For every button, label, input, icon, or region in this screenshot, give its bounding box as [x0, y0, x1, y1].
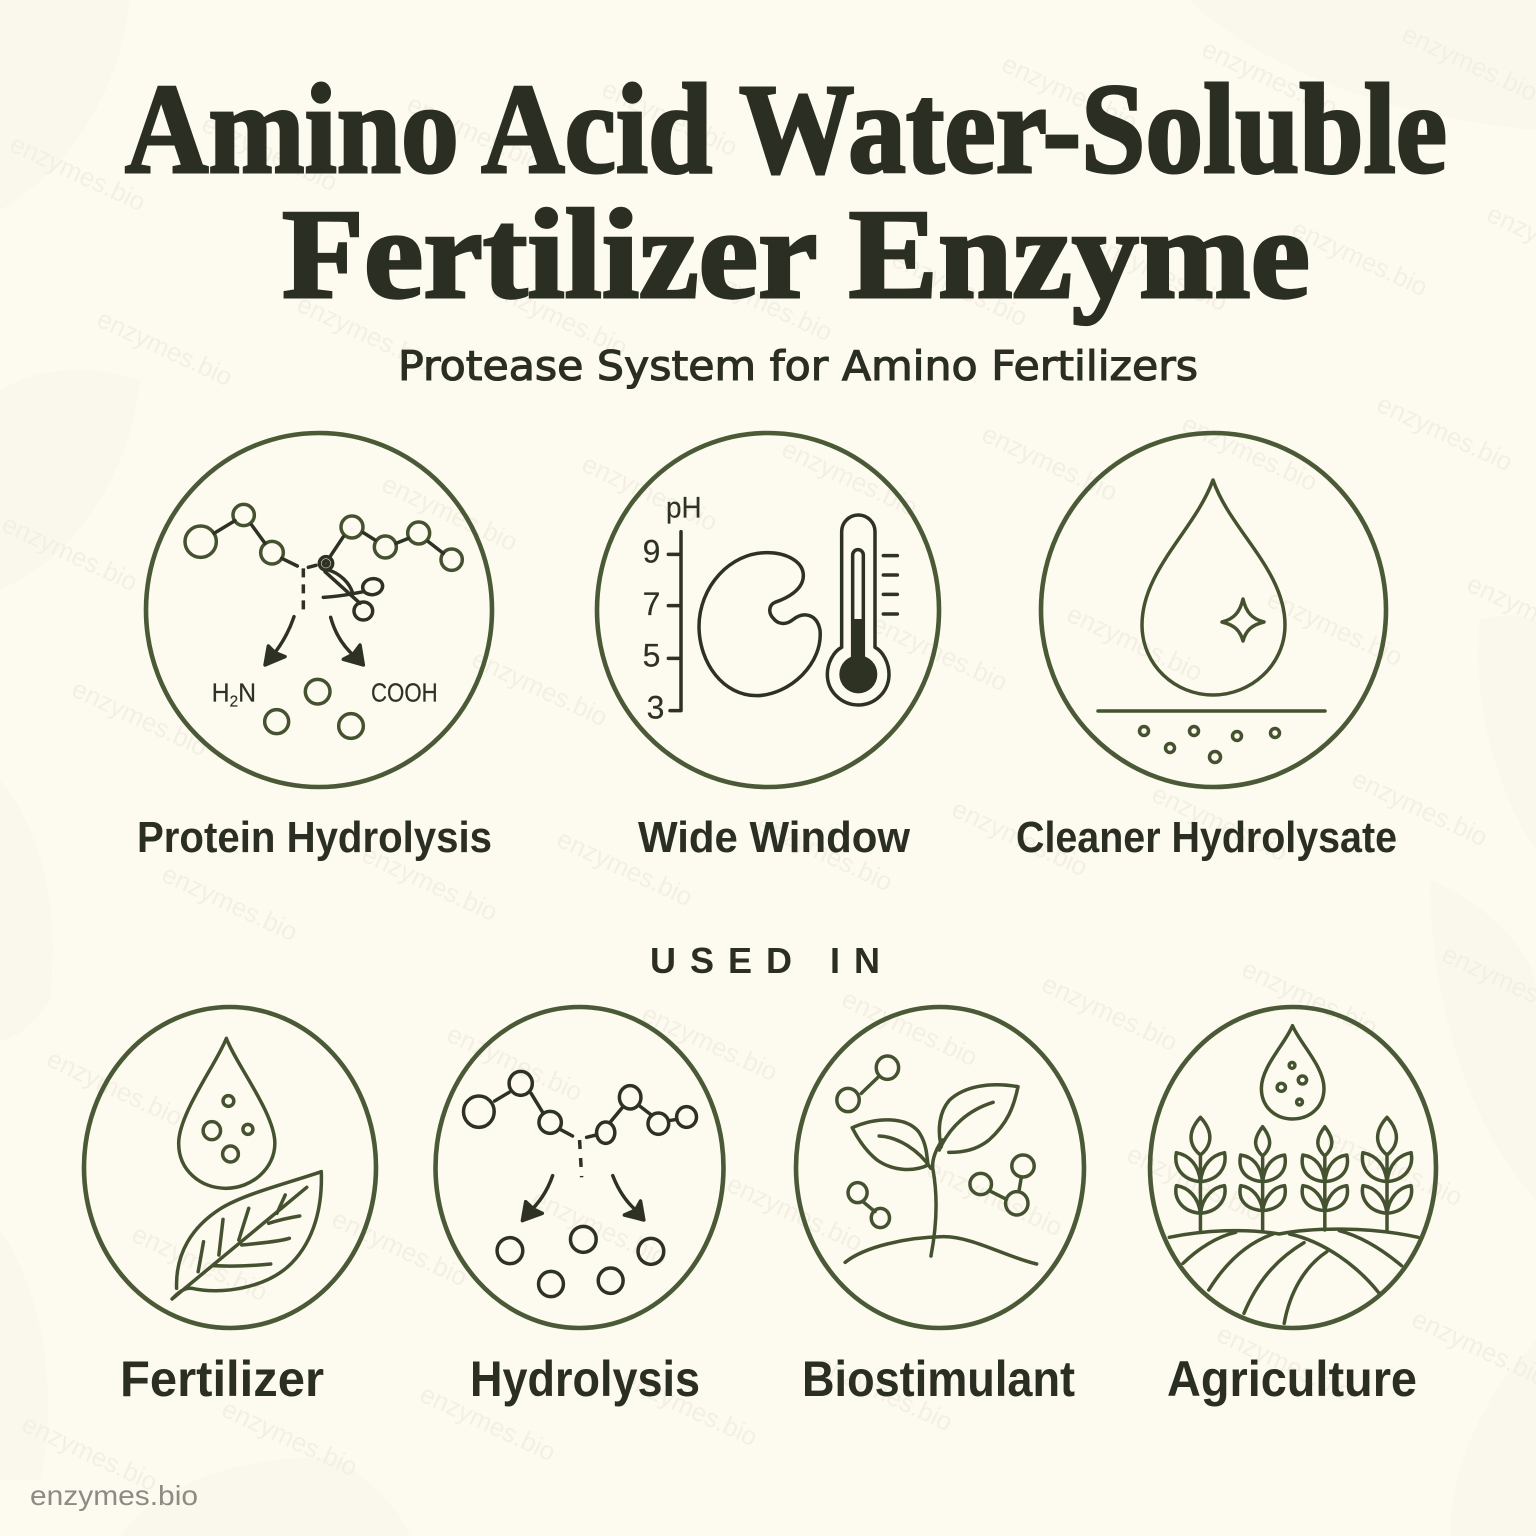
- icon: pH scale, enzyme and thermometer: 9: [643, 534, 660, 570]
- panel: wide window: [597, 433, 939, 862]
- text: enzymes.bio: [1212, 1318, 1357, 1407]
- text: enzymes.bio: [467, 643, 612, 732]
- text: enzymes.bio: [552, 823, 697, 912]
- text: enzymes.bio: [1347, 763, 1492, 852]
- icon: droplet and leaf: [172, 1038, 321, 1299]
- icon: pH scale, enzyme and thermometer: pH: [666, 491, 702, 524]
- label: Wide Window: [638, 813, 911, 862]
- circle border: [84, 1007, 376, 1328]
- icon: droplet over crop field: [1169, 1026, 1418, 1323]
- icon: peptide cleavage with scissors: H: [212, 678, 230, 708]
- label: Cleaner Hydrolysate: [1016, 813, 1397, 862]
- text: enzymes.bio: [442, 1018, 587, 1107]
- text: enzymes.bio: [5, 128, 150, 217]
- text: enzymes.bio: [1197, 33, 1342, 122]
- text: enzymes.bio: [487, 273, 632, 362]
- circle border: [1041, 433, 1386, 787]
- text: enzymes.bio: [887, 243, 1032, 332]
- text: enzymes.bio: [752, 808, 897, 897]
- panel: fertilizer: [84, 1007, 376, 1407]
- text: enzymes.bio: [777, 433, 922, 522]
- text: enzymes.bio: [67, 673, 212, 762]
- subtitle: Protease System for Amino Fertilizers: [398, 342, 1198, 390]
- icon: seedling with molecules: [837, 1056, 1037, 1264]
- text: enzymes.bio: [0, 508, 142, 597]
- text: enzymes.bio: [977, 418, 1122, 507]
- text: enzymes.bio: [637, 998, 782, 1087]
- panel: agriculture: [1150, 1007, 1436, 1407]
- text: enzymes.bio: [947, 793, 1092, 882]
- text: enzymes.bio: [1177, 408, 1322, 497]
- footer brand: enzymes.bio: [30, 1480, 198, 1511]
- text: enzymes.bio: [42, 1043, 187, 1132]
- text: enzymes.bio: [377, 468, 522, 557]
- text: enzymes.bio: [722, 1168, 867, 1257]
- icon: pH scale, enzyme and thermometer: 3: [647, 690, 664, 726]
- text: enzymes.bio: [92, 303, 237, 392]
- icon: peptide cleavage with scissors: 2: [230, 693, 238, 710]
- text: enzymes.bio: [812, 1348, 957, 1437]
- label: Fertilizer: [120, 1351, 324, 1407]
- text: enzymes.bio: [997, 48, 1142, 137]
- circle border: [1150, 1007, 1436, 1328]
- icon: peptide cleavage with scissors: COOH: [371, 678, 438, 708]
- text: enzymes.bio: [837, 983, 982, 1072]
- text: enzymes.bio: [1087, 228, 1232, 317]
- text: enzymes.bio: [327, 1203, 472, 1292]
- label: Hydrolysis: [470, 1351, 700, 1407]
- text: enzymes.bio: [157, 858, 302, 947]
- icon: peptide cleavage with scissors: N: [238, 678, 256, 708]
- text: enzymes.bio: [415, 1378, 560, 1467]
- label: Protein Hydrolysis: [137, 813, 492, 862]
- text: enzymes.bio: [357, 838, 502, 927]
- icon: clean droplet over sediment: [1098, 480, 1325, 762]
- text: enzymes.bio: [127, 1218, 272, 1307]
- circle border: [146, 433, 492, 787]
- panel: protein hydrolysis: [137, 433, 492, 862]
- circle border: [436, 1007, 724, 1328]
- text: enzymes.bio: [597, 73, 742, 162]
- icon: pH scale, enzyme and thermometer: 5: [643, 638, 660, 674]
- text: enzymes.bio: [217, 1393, 362, 1482]
- text: enzymes.bio: [692, 258, 837, 347]
- text: enzymes.bio: [617, 1363, 762, 1452]
- text: enzymes.bio: [1372, 388, 1517, 477]
- circle border: [597, 433, 939, 787]
- text: enzymes.bio: [402, 88, 547, 177]
- heading: used in: USED IN: [650, 940, 880, 981]
- text: enzymes.bio: [922, 1153, 1067, 1242]
- text: enzymes.bio: [17, 1408, 162, 1497]
- text: enzymes.bio: [1037, 968, 1182, 1057]
- text: enzymes.bio: [527, 1183, 672, 1272]
- text: enzymes.bio: [577, 448, 722, 537]
- icon: peptide breaking into amino acids: [463, 1071, 696, 1297]
- text: enzymes.bio: [1287, 213, 1432, 302]
- panel: biostimulant: [796, 1007, 1084, 1407]
- label: Agriculture: [1167, 1351, 1417, 1407]
- text: enzymes.bio: [1147, 778, 1292, 867]
- circle border: [796, 1007, 1084, 1328]
- icon: peptide cleavage with scissors: [185, 504, 462, 738]
- icon: pH scale, enzyme and thermometer: [643, 491, 897, 726]
- text: enzymes.bio: [1237, 953, 1382, 1042]
- panel: hydrolysis: [436, 1007, 724, 1407]
- text: enzymes.bio: [1262, 583, 1407, 672]
- text: enzymes.bio: [1122, 1138, 1267, 1227]
- label: Biostimulant: [802, 1351, 1075, 1407]
- title: Fertilizer Enzyme: [282, 183, 1310, 325]
- title: [125, 58, 1447, 325]
- text: enzymes.bio: [197, 108, 342, 197]
- text: enzymes.bio: [292, 288, 437, 377]
- panel: cleaner hydrolysate: [1016, 433, 1397, 862]
- text: enzymes.bio: [1322, 1123, 1467, 1212]
- text: enzymes.bio: [1062, 598, 1207, 687]
- text: enzymes.bio: [867, 608, 1012, 697]
- icon: pH scale, enzyme and thermometer: 7: [643, 586, 660, 622]
